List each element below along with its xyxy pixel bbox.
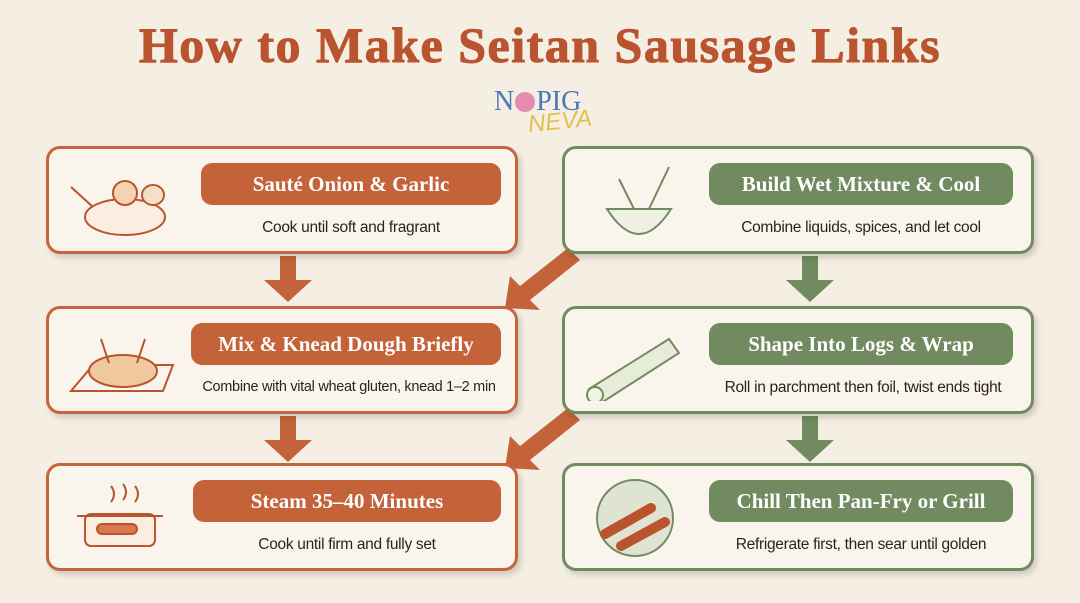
pill: Chill Then Pan-Fry or Grill [737,489,985,513]
pill [709,480,1013,522]
text: Cook until soft and fragrant [262,219,440,236]
icon: grill with sausages [596,479,674,557]
panel: knead [46,306,518,414]
panel: chill [562,463,1034,571]
logo [494,86,593,138]
pill: Shape Into Logs & Wrap [748,332,974,356]
logo: N PIG [494,86,581,117]
pill: Sauté Onion & Garlic [253,172,449,196]
text: Combine with vital wheat gluten, knead 1–2 min [202,379,496,395]
pill [709,323,1013,365]
panel: wet mixture [562,146,1034,254]
icon: pot [77,483,163,547]
pill: Mix & Knead Dough Briefly [218,332,474,356]
panel: shape [562,306,1034,414]
pill: Build Wet Mixture & Cool [742,172,980,196]
panel: saute [46,146,518,254]
text: Refrigerate first, then sear until golden [736,536,986,553]
title: How to Make Seitan Sausage Links [139,17,941,73]
logo: NEVA [527,105,593,138]
pill [193,480,501,522]
panel: steam [46,463,518,571]
pill [191,323,501,365]
icon: pan with onion [70,180,166,236]
icon: wrapped log [586,338,680,401]
text: Roll in parchment then foil, twist ends tight [725,379,1001,396]
icon: bowl [605,166,673,235]
pill [201,163,501,205]
icon: hands kneading [68,338,174,392]
pill: Steam 35–40 Minutes [251,489,443,513]
text: Cook until firm and fully set [258,536,436,553]
text: Combine liquids, spices, and let cool [741,219,981,236]
pill [709,163,1013,205]
